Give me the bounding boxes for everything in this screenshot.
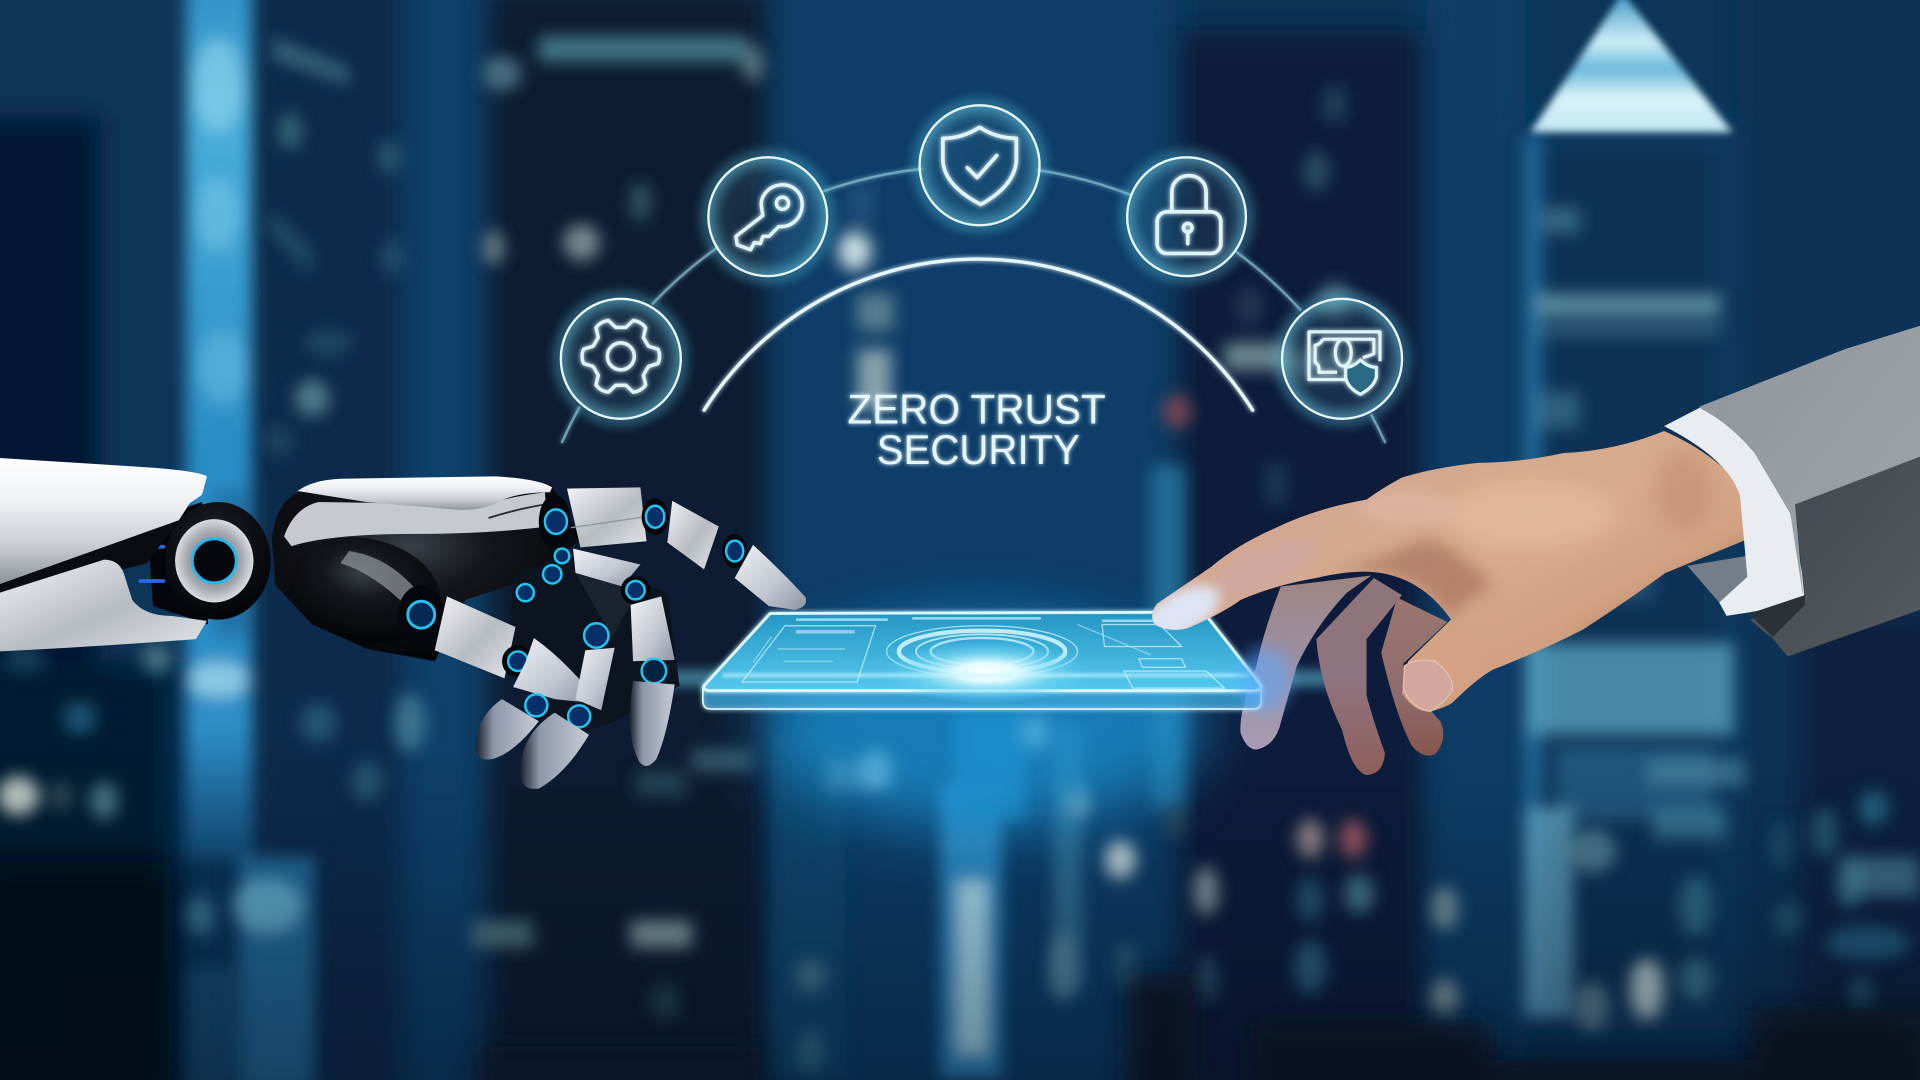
shirt cuff: [1664, 408, 1805, 616]
icon: key: [707, 156, 828, 277]
human back fingers: [1240, 576, 1447, 775]
wrist joint: [165, 502, 271, 620]
thumb segments: [398, 585, 593, 703]
ring finger: [1316, 578, 1402, 775]
pinky finger: [1381, 598, 1447, 756]
icon: shield with check: [918, 104, 1041, 227]
title: SECURITY: [877, 426, 1080, 473]
title: ZERO TRUST: [847, 386, 1106, 433]
index finger: [539, 487, 806, 610]
icon: banknote with shield: [1281, 298, 1403, 420]
title: [847, 386, 1106, 473]
thumb base: [280, 524, 450, 656]
pinky finger: [476, 694, 547, 760]
shirt underside shadow: [1687, 556, 1747, 602]
icon: gear: [560, 298, 682, 420]
hand back and palm: [1152, 431, 1749, 712]
middle finger: [573, 549, 675, 766]
jacket sleeve upper: [1700, 326, 1920, 600]
holographic tablet: [703, 612, 1291, 711]
finger glow at tablet corner: [1237, 648, 1291, 711]
bright tower top: [1531, 0, 1733, 132]
hand shading: [1135, 448, 1751, 698]
human hand and suit sleeve: [1135, 326, 1920, 712]
wrist band: [138, 502, 208, 624]
finger inner mechanics: [508, 551, 680, 735]
icon: padlock: [1126, 156, 1247, 277]
glow of the tablet cast on the scene: [649, 618, 1335, 827]
small back-row joints: [517, 549, 569, 601]
inner bright arc: [704, 259, 1253, 410]
palm white plate: [284, 476, 552, 546]
forearm shell: [0, 458, 207, 651]
arc network connecting the icons: [562, 169, 1385, 442]
robot arm and hand: [0, 458, 806, 789]
jacket sleeve lower: [1750, 457, 1920, 656]
tablet screen: [704, 612, 1261, 691]
sleeve vent: [1750, 595, 1805, 637]
central flare: [883, 640, 1091, 704]
ring finger: [520, 623, 615, 789]
palm black body: [272, 485, 580, 661]
screen interface detail: [742, 618, 1224, 688]
outer connector arc segments: [562, 169, 1385, 442]
tablet slab: [703, 688, 1261, 709]
middle finger: [1240, 576, 1371, 749]
thumb nail: [1403, 660, 1453, 711]
